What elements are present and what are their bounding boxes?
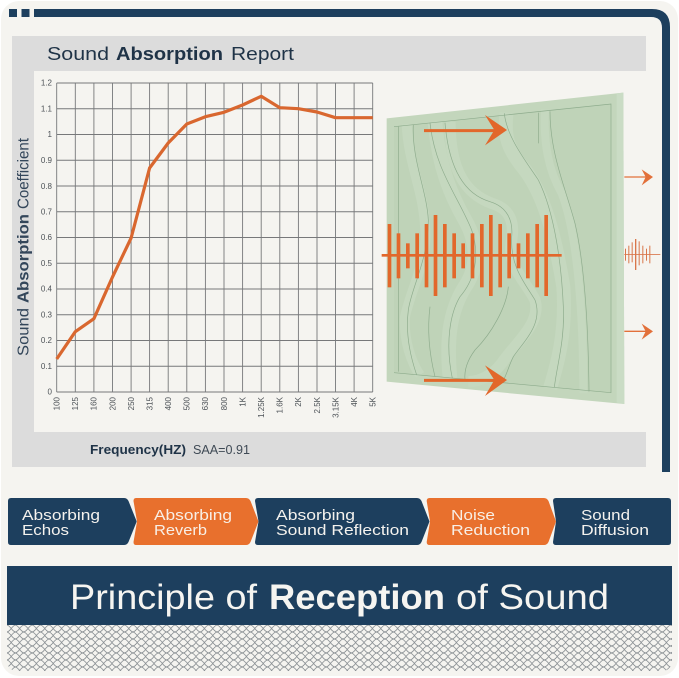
step: absorbing reverb: Reverb	[154, 522, 207, 539]
step: absorbing echos: Echos	[22, 522, 69, 539]
x axis tick labels: 315	[145, 396, 154, 410]
top bar with decorative squares	[9, 9, 670, 472]
y axis tick labels: 1.1	[41, 104, 53, 114]
arrow: transmitted bottom	[624, 324, 653, 340]
step: sound diffusion: Sound	[581, 507, 630, 524]
line chart: absorption coefficient by frequency	[41, 78, 378, 418]
y axis tick labels: 0.2	[41, 336, 53, 345]
process steps row	[8, 498, 671, 545]
panel: sound absorption report	[12, 36, 646, 467]
x axis tick labels: 1.6K	[276, 396, 285, 413]
illustration: acoustic panel with sound waves	[382, 93, 660, 404]
y axis tick labels: 0.7	[41, 208, 53, 216]
y axis title: Absorption	[16, 214, 32, 303]
step: sound diffusion	[553, 498, 671, 545]
arrow: bottom reflection	[424, 376, 500, 385]
y axis tick labels: 0.9	[41, 156, 53, 165]
heading: sound absorption report: Absorption	[116, 43, 223, 64]
x axis tick labels: 1.25K	[257, 396, 266, 418]
heading: sound absorption report: Report	[231, 43, 294, 64]
x axis tick labels: 2K	[294, 396, 303, 407]
x axis tick labels: 800	[220, 396, 229, 410]
step: absorbing sound reflection: Sound Reflection	[276, 522, 409, 539]
step: absorbing reverb	[134, 498, 258, 545]
x axis tick labels: 100	[52, 396, 62, 410]
y axis tick labels: 0.3	[41, 310, 53, 320]
y axis tick labels	[41, 78, 53, 396]
title banner	[7, 566, 672, 625]
y axis title	[16, 137, 32, 356]
y axis tick labels: 0.1	[41, 362, 53, 371]
y axis tick labels: 1	[48, 130, 53, 139]
y axis tick labels: 0.4	[41, 284, 53, 294]
step: absorbing sound reflection: Absorbing	[276, 507, 355, 524]
sound wave: incoming	[382, 215, 562, 296]
absorption curve	[57, 96, 373, 359]
step: noise reduction	[427, 498, 556, 545]
x axis tick labels: 400	[164, 396, 173, 410]
arrow: top reflection	[424, 126, 500, 135]
heading: sound absorption report	[47, 43, 294, 64]
title: principle of reception of sound: Principle of	[70, 578, 257, 617]
x axis tick labels: 3.15K	[331, 396, 340, 418]
x axis tick labels: 160	[90, 396, 99, 410]
x axis title and SAA value: Frequency(HZ)	[90, 443, 186, 457]
x axis tick labels: 125	[71, 396, 80, 410]
x axis tick labels: 630	[201, 396, 210, 410]
y axis tick labels: 0.5	[41, 259, 53, 268]
step: absorbing sound reflection	[255, 498, 430, 545]
y axis tick labels: 0.6	[41, 233, 53, 242]
title: principle of reception of sound: Reception	[269, 578, 445, 617]
footer lattice pattern	[7, 625, 672, 671]
x axis tick labels: 500	[183, 396, 192, 410]
title: principle of reception of sound: of Sound	[456, 578, 609, 617]
x axis tick labels: 2.5K	[313, 396, 322, 413]
title: principle of reception of sound	[70, 578, 609, 617]
y axis title: Sound	[16, 308, 32, 356]
x axis tick labels	[52, 396, 378, 418]
x axis tick labels: 4K	[350, 396, 359, 407]
step: absorbing echos: Absorbing	[22, 507, 100, 524]
report panel background	[12, 36, 646, 467]
y axis title: Coefficient	[16, 137, 32, 209]
y axis tick labels: 1.2	[41, 78, 53, 88]
step: absorbing echos	[8, 498, 137, 545]
heading: sound absorption report: Sound	[47, 43, 109, 64]
y axis tick labels: 0.8	[41, 182, 53, 191]
step: sound diffusion: Diffusion	[581, 522, 649, 539]
x axis tick labels: 1K	[238, 396, 247, 407]
sound wave: transmitted	[624, 239, 660, 270]
arrow: transmitted top	[624, 169, 653, 185]
green acoustic panel	[387, 93, 624, 404]
x axis title and SAA value	[90, 443, 250, 457]
x axis tick labels: 250	[127, 396, 136, 410]
x axis tick labels: 5K	[368, 396, 378, 407]
y axis tick labels: 0	[48, 388, 53, 396]
step: noise reduction: Reduction	[451, 522, 530, 539]
step: absorbing reverb: Absorbing	[154, 507, 232, 524]
x axis title and SAA value: SAA=0.91	[193, 443, 250, 457]
step: noise reduction: Noise	[451, 507, 495, 524]
x axis tick labels: 200	[108, 396, 117, 410]
